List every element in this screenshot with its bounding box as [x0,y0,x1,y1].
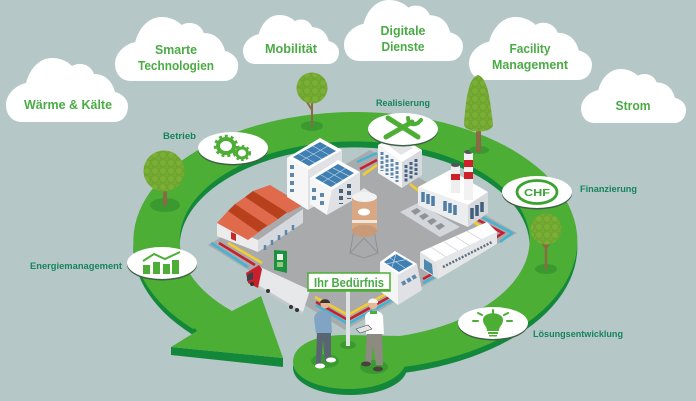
cloud: Wärme & Kälte: Wärme & Kälte [24,97,112,112]
label: Realisierung: Realisierung [376,98,430,109]
building: red roof hall [217,185,303,252]
icon: CHF: CHF [524,187,551,199]
cloud: Facility Management [469,17,592,80]
arrow head [171,296,283,358]
cloud: Mobilität [243,15,339,64]
ring surface [133,112,577,367]
silo [350,188,378,258]
cloud: Facility Management: Management [492,57,569,72]
EV charger [274,250,287,273]
base platform [293,335,404,389]
label: Betrieb: Betrieb [163,131,196,142]
building: factory with chimneys [400,150,488,237]
arrow side [171,347,283,367]
cloud: Digitale Dienste [344,0,463,61]
ring shadow [133,118,577,395]
label: Energiemanagement: Energiemanagement [30,261,123,272]
building: small solar block [380,251,422,305]
cloud: Wärme & Kälte [6,58,128,122]
sign: Ihr Bedürfnis: Ihr Bedürfnis [314,275,384,290]
icon: tools [368,113,438,146]
cloud: Strom: Strom [616,98,650,113]
icon: CHF [502,176,572,210]
icon: gears [198,132,268,166]
sign: Ihr Bedürfnis [308,273,390,349]
label: Lösungsentwicklung: Lösungsentwicklung [533,329,623,340]
icon: light bulb [458,307,528,340]
tree: cypress [464,75,493,154]
icon: bar chart [127,247,197,280]
tree: right on ring [530,214,562,274]
cloud: Digitale Dienste: Digitale [380,23,426,38]
label: Finanzierung: Finanzierung [580,184,637,195]
tree: left on ring [144,150,184,212]
cloud: Smarte Technologien: Technologien [138,58,214,73]
person: left man [311,299,339,368]
cloud: Mobilität: Mobilität [265,41,318,56]
grey ground plane [208,150,517,330]
green cycle ring with arrow [133,112,577,395]
cloud: Smarte Technologien [115,17,238,81]
cloud: Facility Management: Facility [510,41,551,56]
building: solar office [287,138,360,215]
tree: top left of ring [296,72,328,131]
cloud: Strom [581,69,686,123]
cloud: Digitale Dienste: Dienste [382,39,424,54]
building: long white hall [420,222,497,279]
energy pipes [211,153,512,324]
person: right engineer [356,298,388,374]
cloud: Smarte Technologien: Smarte [155,42,197,57]
building: middle office [378,135,422,188]
truck [246,265,310,315]
